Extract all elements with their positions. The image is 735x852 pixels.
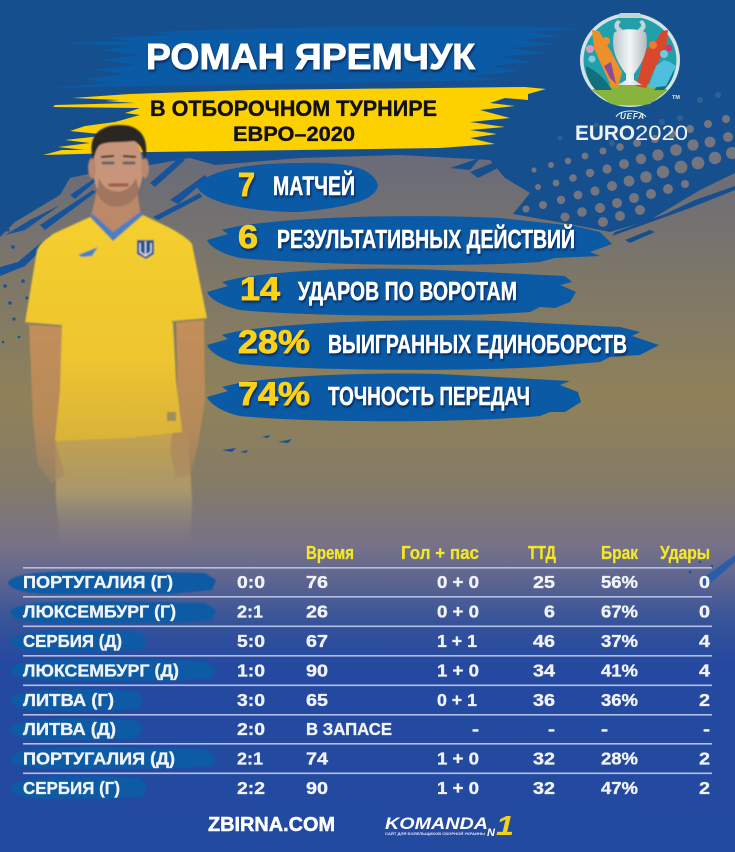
table row: Serbia away: СЕРБИЯ (Д)	[23, 631, 122, 651]
table row: Lithuania home	[23, 690, 710, 710]
table header: Брак	[601, 543, 639, 563]
table row: Luxembourg home: ЛЮКСЕМБУРГ (Г)	[23, 602, 176, 622]
UEFA mark: UEFA	[620, 112, 644, 121]
table row: Lithuania away: -	[601, 719, 608, 739]
table row: Serbia away	[23, 631, 710, 651]
table header: Время	[306, 543, 354, 563]
stat: 28% duels	[207, 320, 659, 370]
stat: 74% passes	[207, 374, 581, 421]
table row: Portugal away: 32	[533, 748, 555, 768]
table row: Lithuania away	[23, 719, 710, 739]
table row: Lithuania home: 36%	[601, 690, 638, 710]
brush: subtitle yellow	[43, 87, 546, 155]
table row: Serbia away: 67	[306, 631, 328, 651]
player photo	[25, 125, 207, 560]
table row: Luxembourg away	[23, 660, 710, 680]
stat: 14 shots	[207, 269, 576, 316]
table row: Lithuania home: 0 + 1	[437, 690, 477, 710]
small scattered marks	[2, 224, 735, 588]
table row: Luxembourg home: 6	[544, 602, 555, 622]
table row: Luxembourg home: 0 + 0	[437, 602, 479, 622]
brand mark	[78, 247, 98, 257]
footer: Komanda logo: 1	[496, 810, 514, 841]
table row: Lithuania home: 2	[699, 690, 710, 710]
table row: Serbia home: 90	[306, 778, 328, 798]
shirt	[25, 215, 207, 441]
shorts	[55, 430, 192, 560]
stat: 7 matches	[197, 163, 378, 212]
table row: Luxembourg home: 2:1	[237, 602, 263, 622]
stat: 7 matches: 7	[238, 166, 255, 203]
table row: Serbia home: 47%	[601, 778, 638, 798]
table row: Serbia home: 2:2	[237, 778, 265, 798]
table row: Portugal home: 56%	[601, 572, 638, 592]
EURO2020 wordmark: 2020	[635, 122, 688, 145]
table row: Luxembourg away: 4	[699, 660, 710, 680]
table row: Lithuania home: 3:0	[237, 690, 265, 710]
trademark: TM	[672, 95, 680, 101]
table row: Luxembourg away: 1:0	[237, 660, 265, 680]
subtitle: В ОТБОРОЧНОМ ТУРНИРЕ	[150, 96, 437, 121]
subtitle	[150, 96, 437, 146]
table row: Lithuania away: -	[548, 719, 555, 739]
stat: 6 actions: 6	[238, 219, 258, 255]
stat: 28% duels: ВЫИГРАННЫХ ЕДИНОБОРСТВ	[328, 331, 627, 359]
table row: Serbia away: 1 + 1	[437, 631, 477, 651]
table row: Luxembourg home: 0	[699, 602, 710, 622]
table row: Lithuania away: ЛИТВА (Д)	[23, 719, 116, 739]
table row: Lithuania home: 65	[306, 690, 328, 710]
table row: Serbia away: 37%	[601, 631, 638, 651]
neck and head	[91, 190, 141, 238]
table row: Portugal away: ПОРТУГАЛИЯ (Д)	[23, 748, 175, 768]
table header	[306, 543, 710, 563]
table header: Удары	[660, 543, 710, 563]
footer: Komanda logo: N	[487, 827, 496, 839]
table row: Lithuania home: ЛИТВА (Г)	[23, 690, 114, 710]
footer: Komanda logo: KOMANDA	[385, 814, 488, 833]
table row: Lithuania away: 2:0	[237, 719, 265, 739]
stat: 28% duels: 28%	[238, 324, 310, 360]
crest	[137, 240, 154, 259]
stat: 6 actions	[207, 216, 612, 265]
table row: Lithuania home: 36	[533, 690, 555, 710]
icon: Euro 2020 logo	[575, 13, 688, 145]
footer: Komanda logo: САЙТ ДЛЯ БОЛЕЛЬЩИКОВ СБОРНОЙ УКРАИНЫ	[385, 832, 486, 836]
stat: 7 matches: МАТЧЕЙ	[273, 170, 355, 201]
EURO2020 wordmark	[575, 122, 688, 145]
table row: Serbia home: 2	[699, 778, 710, 798]
EURO2020 wordmark: EURO	[575, 122, 635, 145]
table row: Serbia away: 4	[699, 631, 710, 651]
stat: 14 shots: 14	[240, 271, 280, 307]
title: РОМАН ЯРЕМЧУК	[146, 36, 476, 77]
subtitle: ЕВРО–2020	[233, 123, 355, 146]
table row: Serbia home: СЕРБИЯ (Г)	[23, 778, 120, 798]
table row: Luxembourg home: 67%	[601, 602, 638, 622]
halftone dots	[522, 92, 735, 227]
stat: 6 actions: РЕЗУЛЬТАТИВНЫХ ДЕЙСТВИЙ	[277, 224, 575, 254]
table row: Lithuania away: В ЗАПАСЕ	[306, 719, 392, 739]
table row: Portugal away: 74	[306, 748, 328, 768]
footer: Komanda logo	[385, 810, 514, 841]
table row: Portugal home: 0 + 0	[437, 572, 479, 592]
stat: 74% passes: 74%	[238, 376, 310, 412]
table row: Portugal home	[23, 572, 710, 592]
footer: site name: ZBIRNA.COM	[208, 814, 335, 836]
table row: Portugal home: 25	[533, 572, 555, 592]
table row: Luxembourg away: 41%	[601, 660, 638, 680]
table row: Serbia away: 5:0	[237, 631, 265, 651]
table header: Гол + пас	[401, 543, 479, 563]
table row: Portugal away: 28%	[601, 748, 638, 768]
brush: title blue	[47, 26, 581, 88]
table row: Luxembourg away: 34	[533, 660, 555, 680]
table row: Portugal home: ПОРТУГАЛИЯ (Г)	[23, 572, 173, 592]
table row: Serbia away: 46	[533, 631, 555, 651]
table row: Portugal away: 1 + 0	[437, 748, 479, 768]
table row: Lithuania away: -	[472, 719, 479, 739]
table row: Portugal away	[23, 748, 710, 768]
table row brushes	[8, 571, 216, 799]
table row: Serbia home	[23, 778, 710, 798]
table row: Portugal home: 76	[306, 572, 328, 592]
table row: Luxembourg home	[23, 602, 710, 622]
table row: Serbia home: 1 + 0	[437, 778, 479, 798]
table row: Portugal home: 0:0	[237, 572, 265, 592]
table row: Luxembourg home: 26	[306, 602, 328, 622]
table row: Luxembourg away: 1 + 0	[437, 660, 479, 680]
table row: Luxembourg away: 90	[306, 660, 328, 680]
table dividers	[23, 567, 712, 774]
table row: Portugal away: 2	[699, 748, 710, 768]
stat: 74% passes: ТОЧНОСТЬ ПЕРЕДАЧ	[328, 383, 530, 411]
arms	[29, 322, 65, 483]
table row: Serbia home: 32	[533, 778, 555, 798]
table row: Portugal away: 2:1	[237, 748, 263, 768]
stat: 14 shots: УДАРОВ ПО ВОРОТАМ	[298, 278, 517, 306]
table row: Luxembourg away: ЛЮКСЕМБУРГ (Д)	[23, 660, 179, 680]
table row: Lithuania away: -	[703, 719, 710, 739]
table header: ТТД	[528, 543, 556, 563]
table row: Portugal home: 0	[699, 572, 710, 592]
